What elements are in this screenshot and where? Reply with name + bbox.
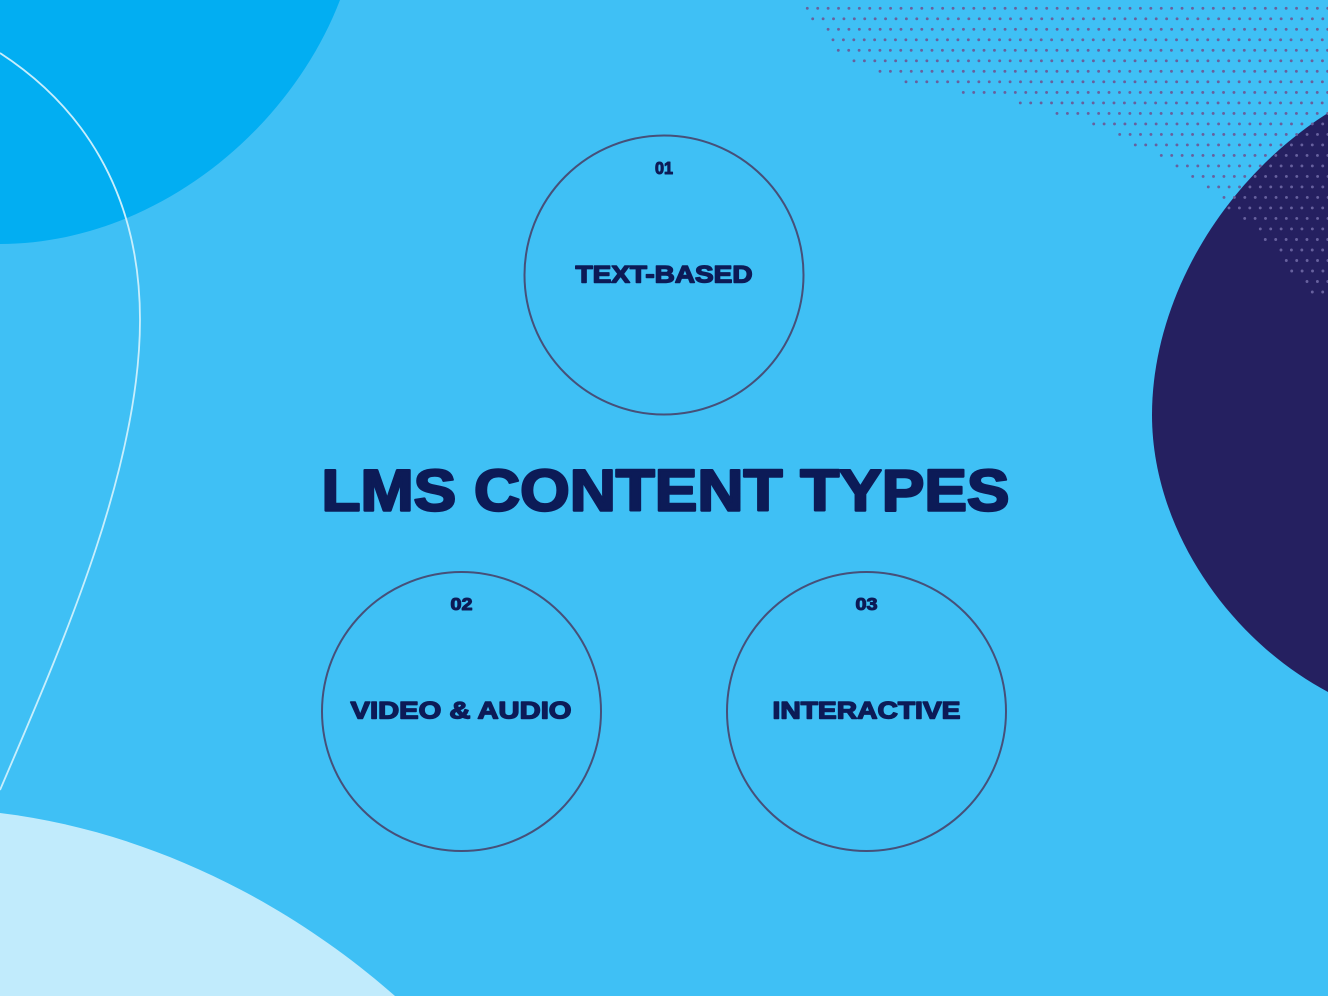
title: LMS CONTENT TYPES xyxy=(322,459,1010,524)
blob: bottom-left pale blue xyxy=(0,813,395,996)
label interactive: INTERACTIVE xyxy=(772,698,960,724)
circle outline 02 xyxy=(322,572,601,851)
circle outline 03 xyxy=(727,572,1006,851)
number 02: 02 xyxy=(450,594,473,614)
panel: 02 video and audio circle xyxy=(322,572,601,851)
panel: 03 interactive circle xyxy=(727,572,1006,851)
dot pattern: top-right xyxy=(807,8,1328,292)
blob: right dark navy xyxy=(1152,113,1328,692)
blob: top-left bright blue xyxy=(0,0,340,244)
label text-based: TEXT-BASED xyxy=(576,262,752,288)
circle outline 01 xyxy=(524,136,804,414)
curved white line xyxy=(0,53,140,790)
number 01: 01 xyxy=(655,158,673,178)
label video and audio: VIDEO & AUDIO xyxy=(350,698,572,724)
number 03: 03 xyxy=(856,594,878,614)
panel: 01 text-based circle xyxy=(524,136,804,414)
